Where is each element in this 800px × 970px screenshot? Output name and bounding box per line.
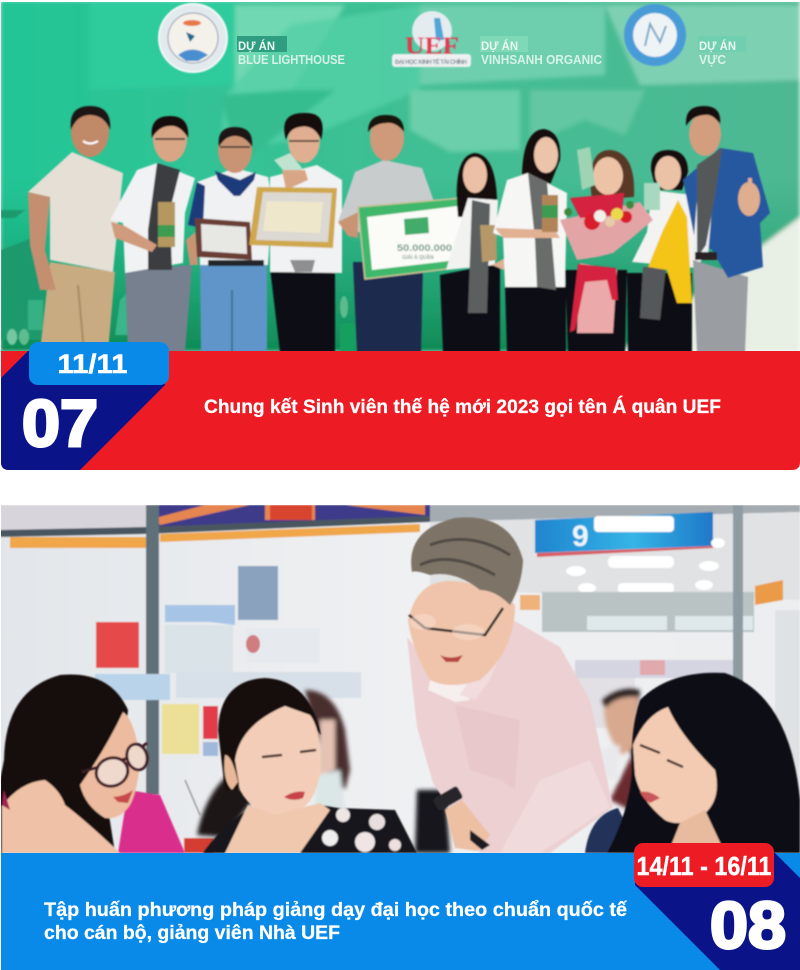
- logo: Vực: [624, 4, 686, 66]
- banner: item 07: [1, 342, 800, 470]
- blue bar: [1, 853, 800, 970]
- man with grey hair: [407, 517, 613, 853]
- date badge: [29, 342, 169, 385]
- label: Vực: DỰ ÁN: [699, 38, 736, 53]
- person 10: [683, 106, 770, 352]
- woman at right: [585, 673, 800, 853]
- date badge: 14/11 - 16/11: [636, 851, 772, 881]
- person 9: [627, 150, 707, 352]
- red bar: [1, 351, 800, 470]
- logo: Blue Lighthouse: [159, 4, 227, 72]
- label: VinhSanh Organic: DỰ ÁN: [481, 38, 518, 53]
- group of people: [28, 106, 770, 352]
- person 3: [186, 127, 272, 352]
- caption: Chung kết Sinh viên thế hệ mới 2023 gọi tên Á quân UEF: [204, 396, 721, 418]
- person 8: [565, 147, 634, 352]
- number 07: 07: [22, 386, 98, 460]
- prize board: GIẢI Á QUÂN: [402, 254, 434, 261]
- person 5: [338, 115, 437, 352]
- person 4: [270, 113, 342, 352]
- background people left: [197, 690, 350, 837]
- decorative city and leaves: [1, 209, 358, 351]
- caption: Tập huấn phương pháp giảng dạy đại học theo chuẩn quốc tế: [44, 900, 627, 921]
- stage backdrop: [0, 0, 800, 352]
- label: VinhSanh Organic: VINHSANH ORGANIC: [481, 53, 602, 67]
- person 7: [493, 129, 567, 352]
- prize board: 50.000.000: [397, 243, 452, 253]
- logo: UEF: UEF: [405, 33, 459, 60]
- label: VinhSanh Organic: [480, 36, 602, 67]
- certificate: dark frame: [195, 218, 252, 260]
- person 6: [440, 153, 505, 352]
- navy diagonal panel: [1, 351, 165, 470]
- date badge: 11/11: [58, 349, 128, 379]
- background people right: [415, 689, 645, 853]
- caption: [44, 900, 627, 944]
- label: Blue Lighthouse: [237, 36, 345, 67]
- banner: item 08: [1, 843, 800, 970]
- prize board: [356, 196, 463, 281]
- woman in the middle: [203, 678, 417, 853]
- woman at left: [0, 674, 185, 853]
- label: Blue Lighthouse: BLUE LIGHTHOUSE: [238, 53, 345, 67]
- date badge: [634, 843, 774, 887]
- bouquet: [560, 193, 653, 333]
- photo: training workshop: [0, 505, 800, 855]
- label: Vực: VỰC: [699, 53, 726, 67]
- person 2: [110, 116, 195, 352]
- logo: UEF: ĐẠI HỌC KINH TẾ TÀI CHÍNH: [395, 58, 467, 66]
- logo: UEF: [392, 11, 471, 67]
- label: Blue Lighthouse: DỰ ÁN: [238, 38, 275, 53]
- classroom background: 9: [572, 520, 589, 553]
- certificate: gold frame: [249, 187, 337, 248]
- yellow scarf: [648, 200, 692, 303]
- photo: award ceremony group: [0, 0, 800, 352]
- label: Vực: [698, 36, 746, 67]
- classroom background: [0, 505, 800, 855]
- caption: cho cán bộ, giảng viên Nhà UEF: [44, 923, 340, 944]
- navy diagonal panel: [635, 853, 800, 970]
- person 1: [28, 106, 123, 352]
- number 08: 08: [710, 888, 786, 962]
